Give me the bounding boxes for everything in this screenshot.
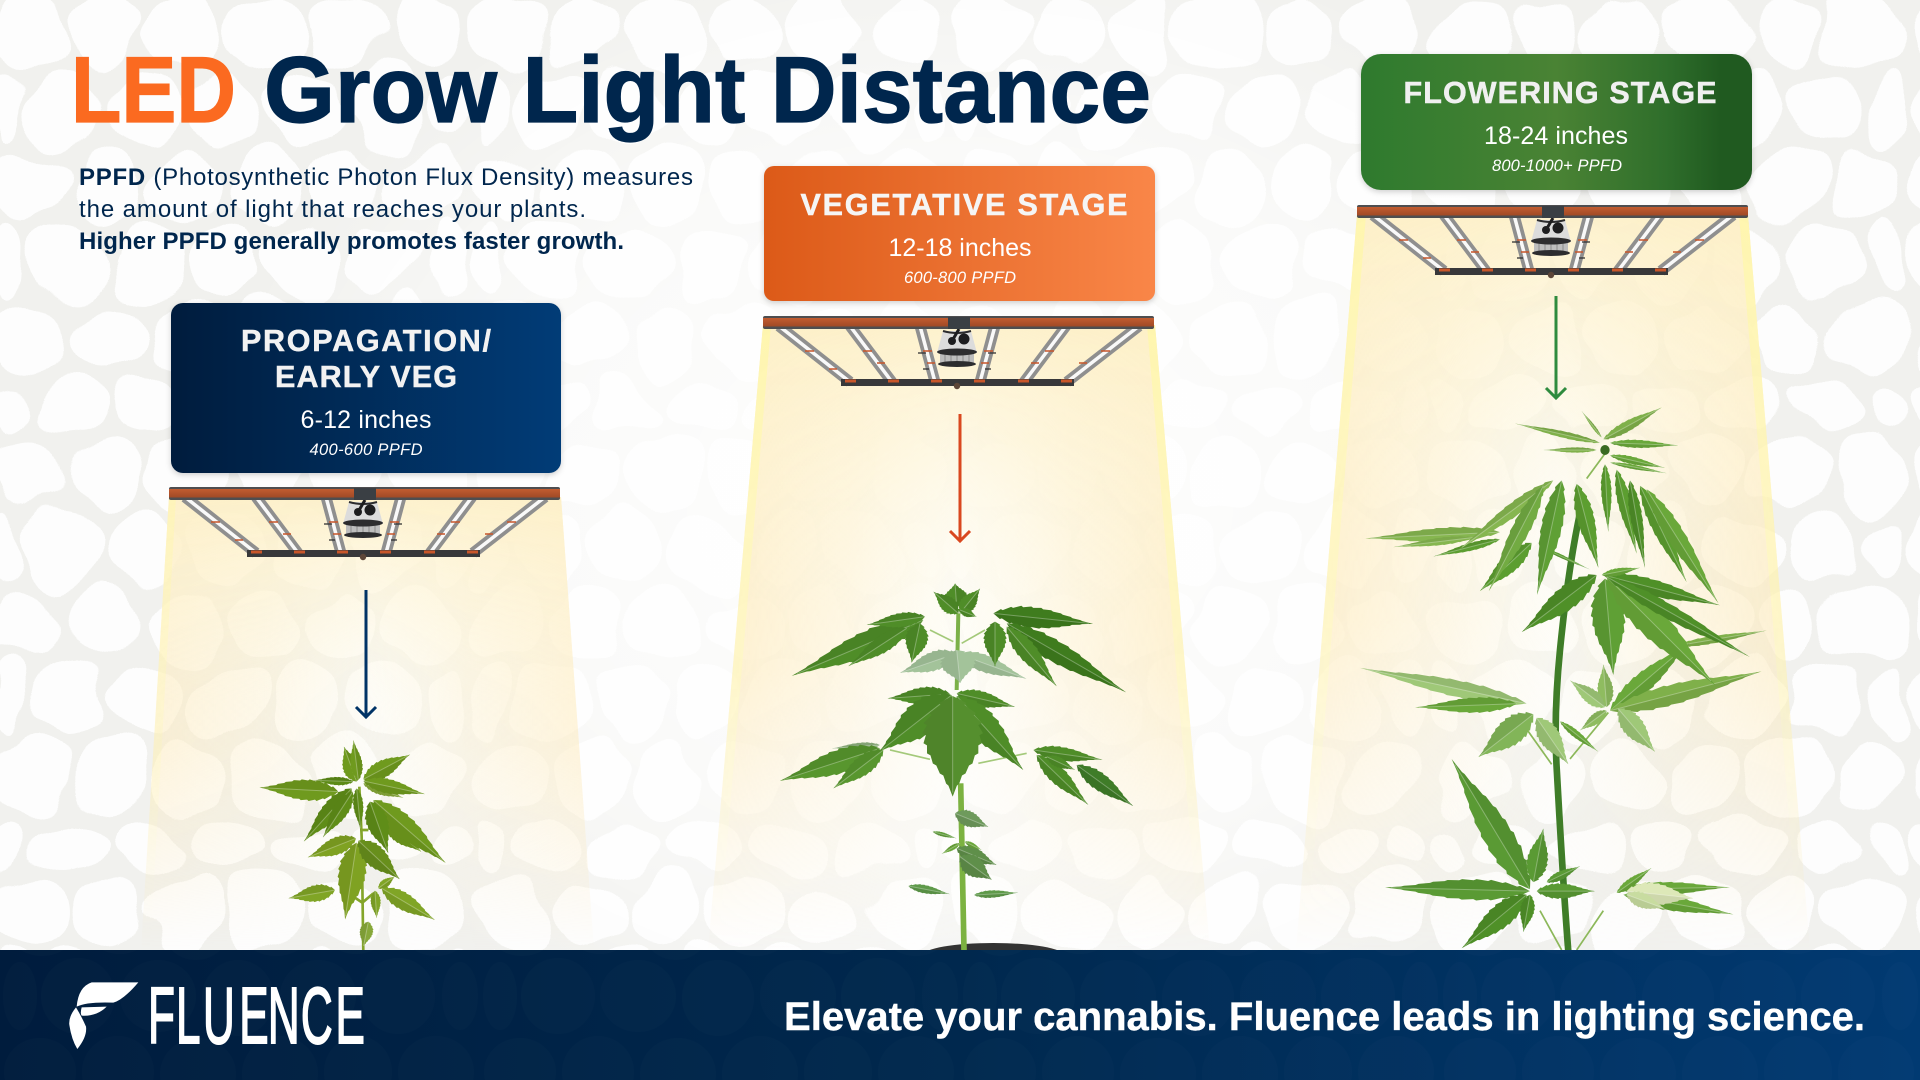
- arrow: propagation distance: [356, 590, 376, 717]
- intro text: Higher PPFD generally promotes faster growth.: [79, 228, 624, 255]
- plant: flowering: [1358, 402, 1767, 958]
- logo wordmark: FLUENCE: [148, 971, 365, 1060]
- LED fixture: vegetative: [763, 316, 1154, 389]
- panel: vegetative stage: 12-18 inches: [888, 234, 1032, 262]
- light cone: vegetative: [708, 325, 1210, 950]
- plant: vegetative: [776, 583, 1139, 967]
- panel: propagation / early veg: PROPAGATION/: [241, 324, 492, 358]
- arrow: flowering distance: [1546, 296, 1566, 398]
- panel: flowering stage: FLOWERING STAGE: [1404, 76, 1716, 110]
- plant: propagation seedling: [259, 739, 453, 953]
- panel: propagation / early veg: 400-600 PPFD: [310, 441, 423, 459]
- panel: flowering stage: 800-1000+ PPFD: [1492, 157, 1622, 175]
- panel: flowering stage: [1361, 54, 1752, 190]
- panel: flowering stage: 18-24 inches: [1484, 122, 1628, 150]
- intro text: [79, 164, 693, 255]
- panel: propagation / early veg: 6-12 inches: [300, 406, 432, 434]
- panel: propagation / early veg: [171, 303, 561, 473]
- panel: vegetative stage: VEGETATIVE STAGE: [800, 188, 1128, 222]
- LED fixture: flowering: [1357, 205, 1748, 278]
- intro text: PPFD (Photosynthetic Photon Flux Density) measures: [79, 164, 693, 191]
- arrow: vegetative distance: [950, 414, 970, 541]
- panel: vegetative stage: 600-800 PPFD: [904, 269, 1016, 287]
- light cone: propagation: [144, 497, 590, 909]
- title: Grow Light Distance: [264, 37, 1151, 142]
- panel: vegetative stage: [764, 166, 1155, 301]
- panel: propagation / early veg: EARLY VEG: [275, 360, 457, 394]
- LED fixture: propagation: [169, 487, 560, 560]
- intro text: the amount of light that reaches your plants.: [79, 196, 586, 223]
- title: LED: [71, 37, 236, 142]
- logo mark: [69, 982, 138, 1049]
- footer banner: [0, 950, 1920, 1080]
- light cone: flowering: [1296, 215, 1810, 950]
- footer tagline: Elevate your cannabis. Fluence leads in lighting science.: [784, 995, 1865, 1039]
